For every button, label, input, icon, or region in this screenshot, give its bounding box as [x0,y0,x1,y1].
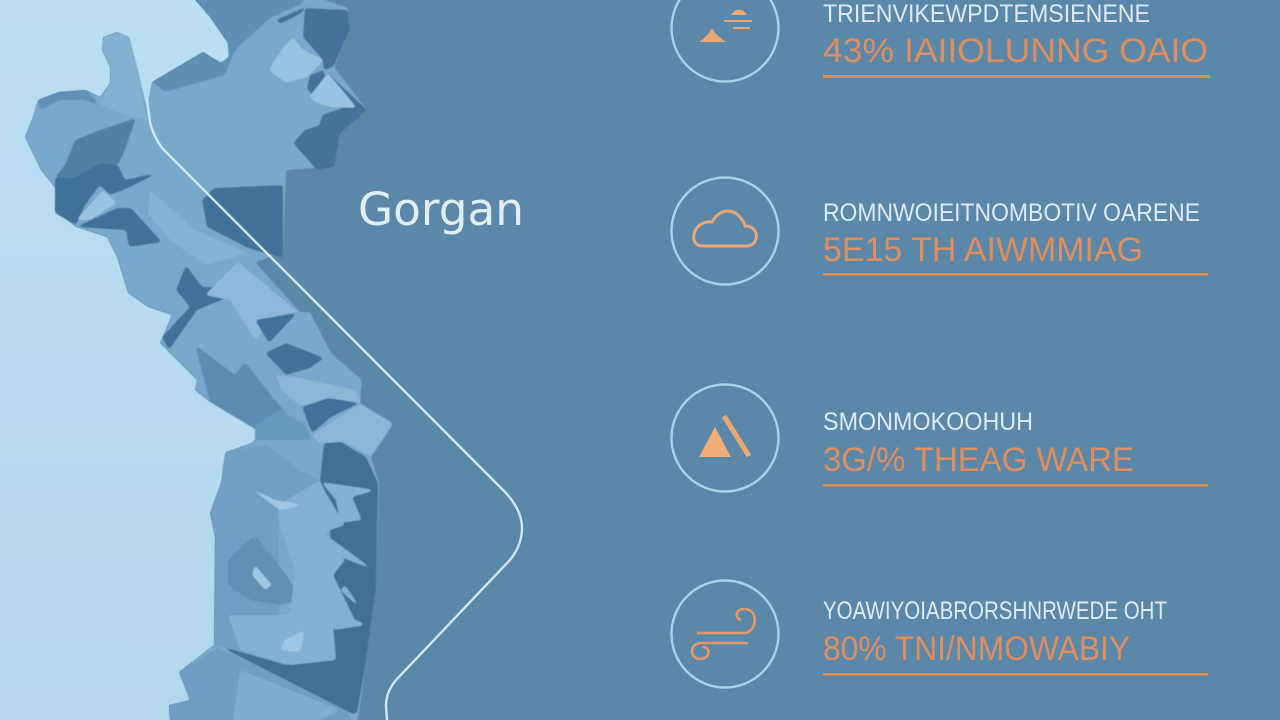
icon: mountain with haze [699,10,752,42]
row 3 heading: SMONMOKOOHUH [823,408,1033,436]
icon ring 2 [672,178,778,284]
pale glint lower [252,565,272,590]
central pale strip [228,480,355,665]
lower mid block [228,535,298,605]
northern dark strip [276,5,310,24]
row 2 [672,178,1208,284]
row 3 statistic: 3G/% THEAG WARE [823,441,1134,479]
dark crag south ridge [255,313,297,343]
row 2 statistic: 5E15 TH AIWMMIAG [823,231,1143,269]
icon: wind [692,609,755,659]
central-west dark wedge [76,208,162,247]
pale facet north [269,37,324,83]
row 4 rule [823,673,1208,676]
icon ring 3 [672,384,778,492]
row 3 [672,384,1208,492]
dark slab [302,398,360,433]
light sky area on the left [0,0,262,720]
pale glints [245,485,305,510]
pale ridge south [205,262,298,340]
white route line [147,100,522,720]
central dark block [202,185,283,257]
pale spike three [340,585,362,610]
central pale facet [148,190,248,265]
western dark upper band [55,118,136,180]
icon: cloud [694,211,756,246]
icon ring 4 [672,580,778,688]
row 4 heading: YOAWIYOIABRORSHNRWEDE OHT [823,597,1167,625]
southern dark wedge [217,645,360,715]
icon: peak with slope [699,416,749,457]
pale slab east [275,375,362,405]
row 1 statistic: 43% IAIIOLUNNG OAIO [823,32,1208,70]
row 2 heading: ROMNWOIEITNOMBOTIV OARENE [823,199,1200,227]
ridge shading [38,90,100,110]
crest knob [255,410,312,440]
pale spike two [326,535,374,570]
upper mid-blue ridge [152,0,303,92]
row 1 rule [823,75,1210,78]
pale glint bottom [280,630,305,652]
row 1 [672,0,1210,82]
mid dark block [162,265,231,350]
pale slab tip [312,404,393,457]
western dark lower band [55,163,160,225]
city label: Gorgan [358,183,524,236]
mountain map of Gorgan [25,0,393,720]
row 2 rule [823,273,1208,276]
pale inset west [76,190,117,220]
row 1 heading: TRIENVIKEWPDTEMSIENENE [823,0,1150,28]
mountain base silhouette [25,0,393,720]
southern lower slab [169,648,355,720]
lower block left [210,445,325,660]
northern dark crags [266,8,367,170]
right dark column [217,442,378,714]
southern pale facet [232,670,340,720]
pale spike four [333,610,366,630]
pale spike one [321,482,376,523]
thumb ridge highlight [100,32,147,120]
row 3 rule [823,484,1208,487]
pale facet east [309,73,357,108]
row 4 statistic: 80% TNI/NMOWABIY [823,630,1130,668]
icon ring 1 [672,0,778,82]
dark crag lower [265,343,324,375]
row 4 [672,580,1208,688]
mid shadow [195,345,300,432]
